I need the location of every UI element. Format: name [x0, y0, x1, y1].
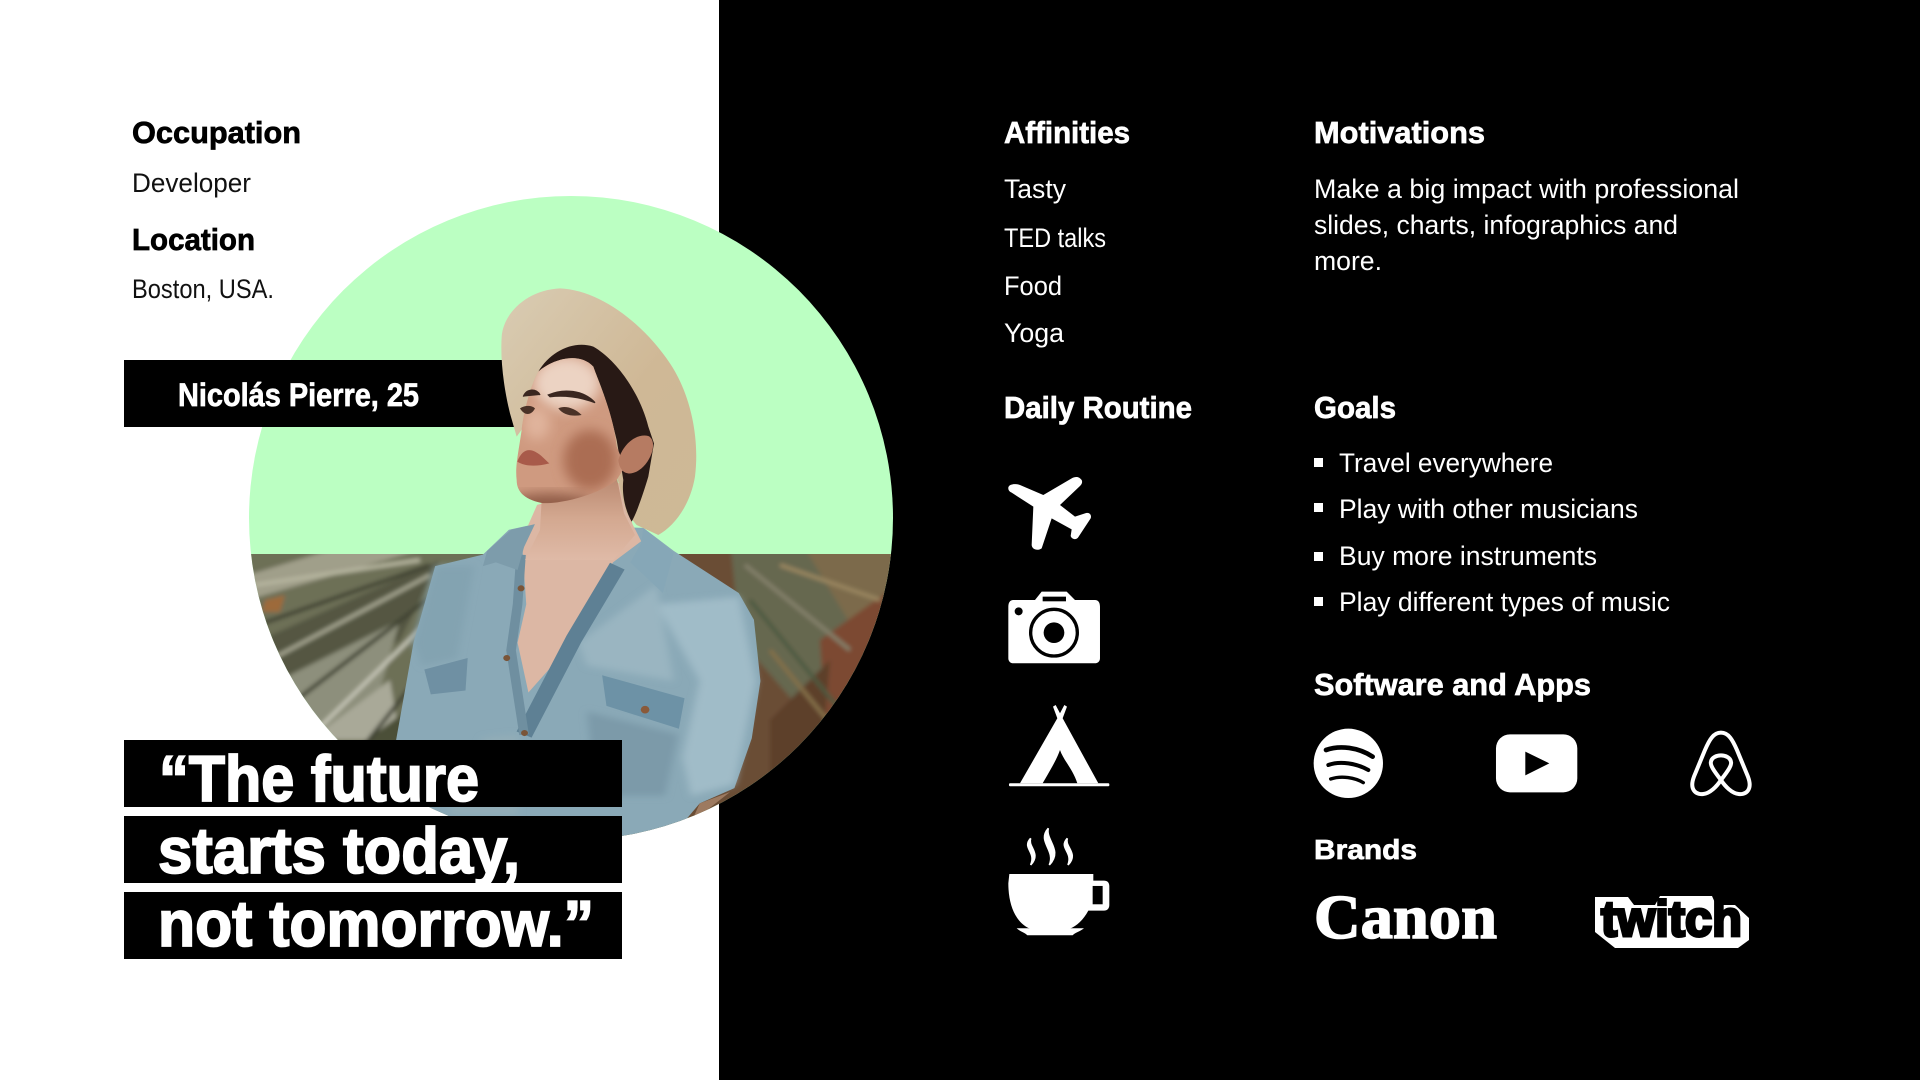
logo: canon: Canon	[1314, 884, 1497, 952]
eyebrows	[523, 390, 595, 403]
heading: affinities: Affinities	[1004, 115, 1130, 150]
shirt body	[396, 526, 760, 836]
heading: location: Location	[132, 222, 255, 257]
mouth	[517, 450, 549, 466]
plackets	[524, 566, 617, 735]
collars	[483, 524, 535, 570]
chest skin	[518, 482, 641, 692]
hat	[501, 288, 696, 535]
heading: motivations: Motivations	[1314, 115, 1485, 150]
icon: youtube	[1496, 734, 1577, 792]
heading: occupation: Occupation	[132, 115, 301, 150]
brands block	[1314, 834, 1749, 952]
icon: airplane	[1008, 477, 1091, 550]
affinity: food: Food	[1004, 271, 1062, 301]
quote line 2: starts today,	[158, 814, 520, 887]
logo: twitch: twitch	[1601, 891, 1742, 947]
affinity: tasty: Tasty	[1004, 174, 1066, 204]
quote line 1	[124, 740, 622, 815]
hair	[538, 345, 654, 522]
face	[516, 358, 622, 504]
name banner: Nicolás Pierre, 25	[178, 377, 419, 413]
text: city: Boston, USA.	[132, 274, 274, 304]
motivations paragraph	[1314, 174, 1739, 276]
shirt shading	[413, 566, 756, 815]
quote banner	[124, 740, 622, 960]
location block	[132, 222, 274, 304]
affinities block	[1004, 115, 1130, 348]
motivations paragraph: Make a big impact with professional	[1314, 174, 1739, 204]
quote line 3: not tomorrow.”	[158, 887, 594, 960]
panel: black right background	[719, 0, 1920, 1080]
app icons	[1314, 729, 1750, 798]
affinity: ted talks: TED talks	[1004, 223, 1106, 253]
icon: airbnb	[1692, 733, 1750, 794]
man: shirt and skin	[396, 482, 760, 872]
eyes	[520, 406, 582, 416]
goal 4: Play different types of music	[1339, 587, 1670, 617]
goal 3: Buy more instruments	[1339, 541, 1597, 571]
pockets	[424, 658, 468, 694]
goal 2: Play with other musicians	[1339, 494, 1638, 524]
heading: software and apps: Software and Apps	[1314, 667, 1591, 702]
icon: coffee cup	[1008, 828, 1109, 935]
software and apps block	[1314, 667, 1750, 798]
quote line 1: “The future	[159, 742, 479, 815]
mint circle behind portrait	[249, 196, 893, 840]
foliage background	[251, 554, 891, 836]
motivations paragraph: more.	[1314, 246, 1382, 276]
heading: brands: Brands	[1314, 834, 1417, 865]
man: hat and head	[501, 288, 696, 560]
icon: spotify	[1314, 729, 1383, 798]
heading: goals: Goals	[1314, 390, 1396, 425]
portrait photo in circle	[240, 288, 920, 872]
icon: tent	[1009, 705, 1109, 786]
heading: daily routine: Daily Routine	[1004, 390, 1192, 425]
daily routine block	[1004, 390, 1192, 935]
text: developer: Developer	[132, 168, 251, 198]
occupation block	[132, 115, 301, 198]
icon: camera	[1008, 592, 1100, 663]
routine icons	[1008, 477, 1109, 935]
neck	[525, 477, 635, 560]
motivations block	[1314, 115, 1739, 276]
ear	[618, 436, 653, 473]
goal 1: Travel everywhere	[1339, 448, 1553, 478]
goals block	[1314, 390, 1670, 617]
name banner	[124, 360, 516, 427]
affinity: yoga: Yoga	[1004, 318, 1065, 348]
motivations paragraph: slides, charts, infographics and	[1314, 210, 1678, 240]
